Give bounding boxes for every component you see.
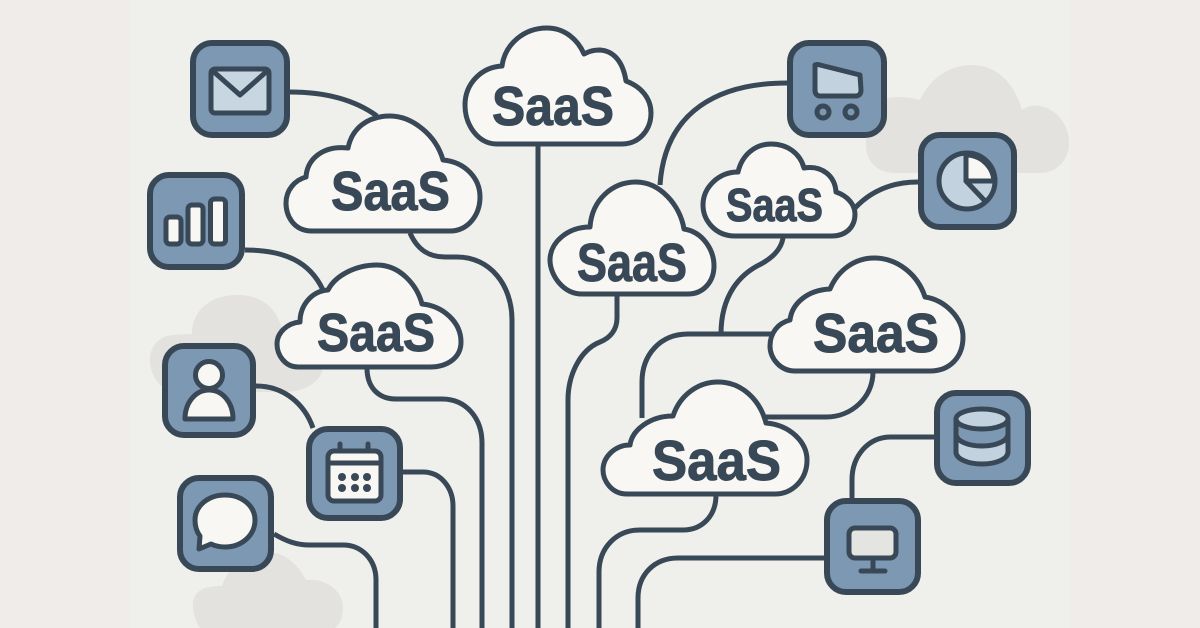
cloud: top center: SaaS: [492, 75, 614, 137]
icon: chat bubble: [180, 478, 271, 569]
cloud: right: [770, 258, 963, 371]
cloud: lower right: [603, 382, 807, 494]
connector: cart to cloud: [660, 83, 787, 185]
connector: calendar to bottom: [403, 472, 453, 628]
icon: bar chart: [150, 175, 242, 267]
cloud: center right: SaaS: [577, 233, 687, 293]
connector: left upper cloud to bottom: [410, 233, 512, 628]
background cloud: left: [150, 295, 323, 392]
icon: calendar: [309, 429, 400, 518]
connector: mail to cloud: [290, 92, 377, 116]
icon: pie chart: [921, 135, 1014, 227]
background cloud: top right: [866, 65, 1069, 173]
icon: mail: [193, 43, 287, 135]
connector: lower cloud to bottom: [599, 495, 716, 628]
connector: center trunk: [536, 144, 540, 628]
connector: monitor to bottom: [638, 558, 824, 628]
icon: shopping cart: [790, 43, 884, 135]
connector: left lower cloud to bottom: [367, 368, 482, 628]
cloud: right: SaaS: [813, 302, 939, 364]
connector: user to calendar: [256, 386, 313, 428]
connector: chart to cloud: [245, 250, 323, 290]
cloud: upper left: SaaS: [331, 160, 450, 222]
icon: monitor: [827, 501, 918, 592]
connector: right cloud underside: [766, 372, 873, 417]
cloud: lower left: SaaS: [317, 303, 435, 363]
cloud: lower left: [277, 265, 461, 367]
connector: pie to cloud: [855, 182, 918, 208]
cloud: lower right: SaaS: [652, 429, 781, 493]
cloud: center right: [550, 182, 714, 294]
cloud: top center: [465, 28, 651, 144]
connector: right cloud to lower cloud: [642, 334, 771, 418]
connector: small cloud to right cloud: [721, 238, 783, 334]
connector: chat to bottom: [274, 534, 376, 628]
cloud: small upper right: SaaS: [726, 179, 823, 231]
cloud: small upper right: [703, 144, 855, 236]
connector: database to monitor: [852, 437, 934, 498]
icon: database: [937, 393, 1028, 483]
cloud: upper left: [286, 116, 480, 231]
connector: mid cloud to bottom: [568, 296, 617, 628]
icon: user: [165, 346, 253, 435]
background cloud: bottom left: [193, 552, 343, 628]
